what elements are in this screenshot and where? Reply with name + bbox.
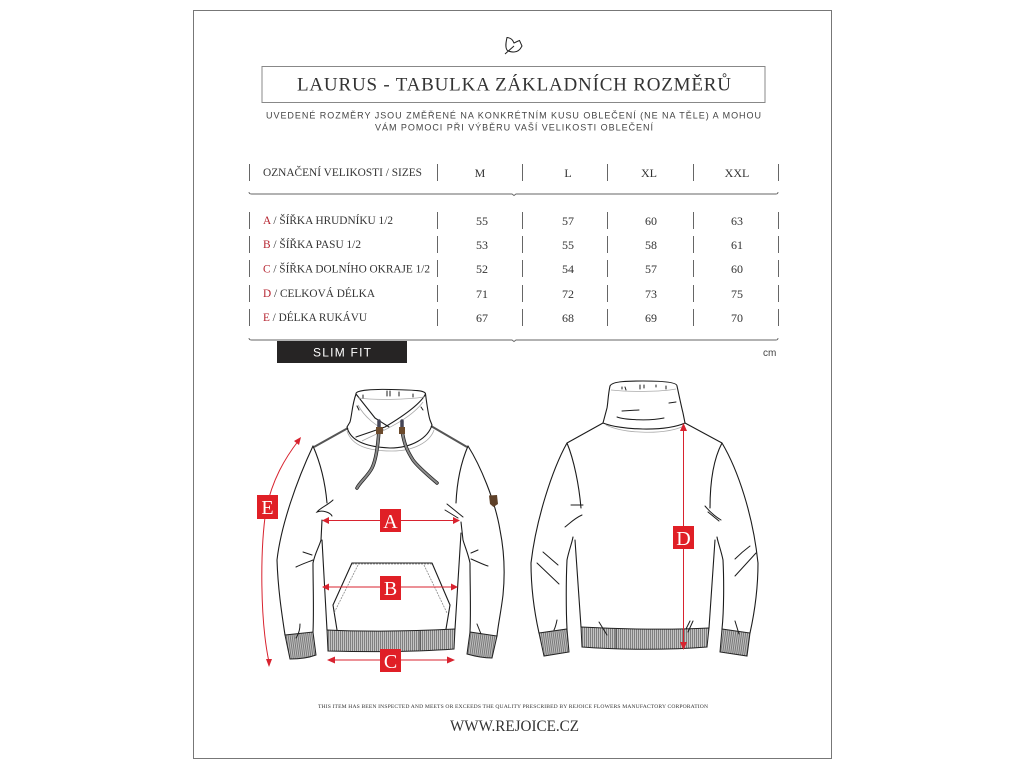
- slim fit badge: [277, 341, 407, 363]
- measure D: [673, 423, 694, 650]
- intro text: UVEDENÉ ROZMĚRY JSOU ZMĚŘENÉ NA KONKRÉTNÍM KUSU OBLEČENÍ (NE NA TĚLE) A MOHOU: [266, 110, 761, 120]
- row D: 72: [562, 287, 574, 301]
- icon: leaf logo: [505, 38, 522, 54]
- front sweatshirt: [277, 389, 504, 659]
- row B: 58: [645, 238, 657, 252]
- front drawstrings: [357, 421, 437, 488]
- row A: 63: [731, 214, 743, 228]
- row C: 60: [731, 262, 743, 276]
- front body outline: [277, 446, 504, 636]
- front collar: [347, 389, 432, 448]
- back wrinkles: [537, 505, 756, 635]
- back collar: [603, 381, 685, 429]
- table header: M: [475, 166, 486, 180]
- footer note: THIS ITEM HAS BEEN INSPECTED AND MEETS OR EXCEEDS THE QUALITY PRESCRIBED BY REJOICE FLOWERS MANUFACTORY CORPORATION: [318, 704, 708, 710]
- back ribbed hem and cuffs: [539, 627, 750, 656]
- row C: 52: [476, 262, 488, 276]
- row A: 57: [562, 214, 574, 228]
- row E: 69: [645, 311, 657, 325]
- measure D: D: [676, 528, 691, 550]
- back body outline: [531, 423, 758, 633]
- table header: OZNAČENÍ VELIKOSTI / SIZES: [263, 165, 422, 179]
- row E: E / DÉLKA RUKÁVU: [263, 310, 367, 324]
- intro text: VÁM POMOCI PŘI VÝBĚRU VAŠÍ VELIKOSTI OBLEČENÍ: [375, 122, 653, 132]
- row E: 67: [476, 311, 488, 325]
- table header: XXL: [725, 166, 749, 180]
- measure E: [257, 437, 301, 667]
- table header: L: [564, 166, 572, 180]
- measure B: [322, 576, 458, 600]
- measure A: [322, 509, 460, 533]
- row B: 53: [476, 238, 488, 252]
- row A: 55: [476, 214, 488, 228]
- outer frame: [194, 10, 832, 758]
- title: [262, 66, 765, 102]
- row C: [263, 262, 743, 276]
- row C: 54: [562, 262, 574, 276]
- row D: 73: [645, 287, 657, 301]
- row D: 71: [476, 287, 488, 301]
- intro text: [266, 110, 761, 132]
- measure E: E: [261, 497, 274, 519]
- row A: 60: [645, 214, 657, 228]
- website: WWW.REJOICE.CZ: [450, 718, 579, 735]
- row E: [263, 310, 743, 325]
- row D: D / CELKOVÁ DÉLKA: [263, 286, 375, 300]
- row B: [263, 237, 743, 252]
- table header: [249, 164, 778, 196]
- table header: XL: [641, 166, 657, 180]
- row A: A / ŠÍŘKA HRUDNÍKU 1/2: [263, 213, 393, 227]
- table rows: [249, 212, 778, 342]
- measure C: [327, 649, 455, 673]
- front sleeve badge: [489, 495, 498, 507]
- slim fit badge: SLIM FIT: [313, 346, 372, 360]
- back sweatshirt: [531, 381, 758, 656]
- measure A: A: [383, 511, 398, 533]
- row A: [263, 213, 743, 228]
- front wrinkles: [296, 500, 488, 638]
- front pocket: [333, 563, 450, 630]
- front ribbed hem and cuffs: [285, 629, 497, 659]
- row B: 61: [731, 238, 743, 252]
- title: LAURUS - TABULKA ZÁKLADNÍCH ROZMĚRŮ: [297, 74, 731, 96]
- measure C: C: [384, 651, 397, 673]
- row D: [263, 286, 743, 301]
- row E: 70: [731, 311, 743, 325]
- row D: 75: [731, 287, 743, 301]
- row B: 55: [562, 238, 574, 252]
- measure B: B: [384, 578, 397, 600]
- unit label: cm: [763, 348, 776, 359]
- row B: B / ŠÍŘKA PASU 1/2: [263, 237, 361, 251]
- row C: 57: [645, 262, 657, 276]
- row C: C / ŠÍŘKA DOLNÍHO OKRAJE 1/2: [263, 262, 430, 276]
- row E: 68: [562, 311, 574, 325]
